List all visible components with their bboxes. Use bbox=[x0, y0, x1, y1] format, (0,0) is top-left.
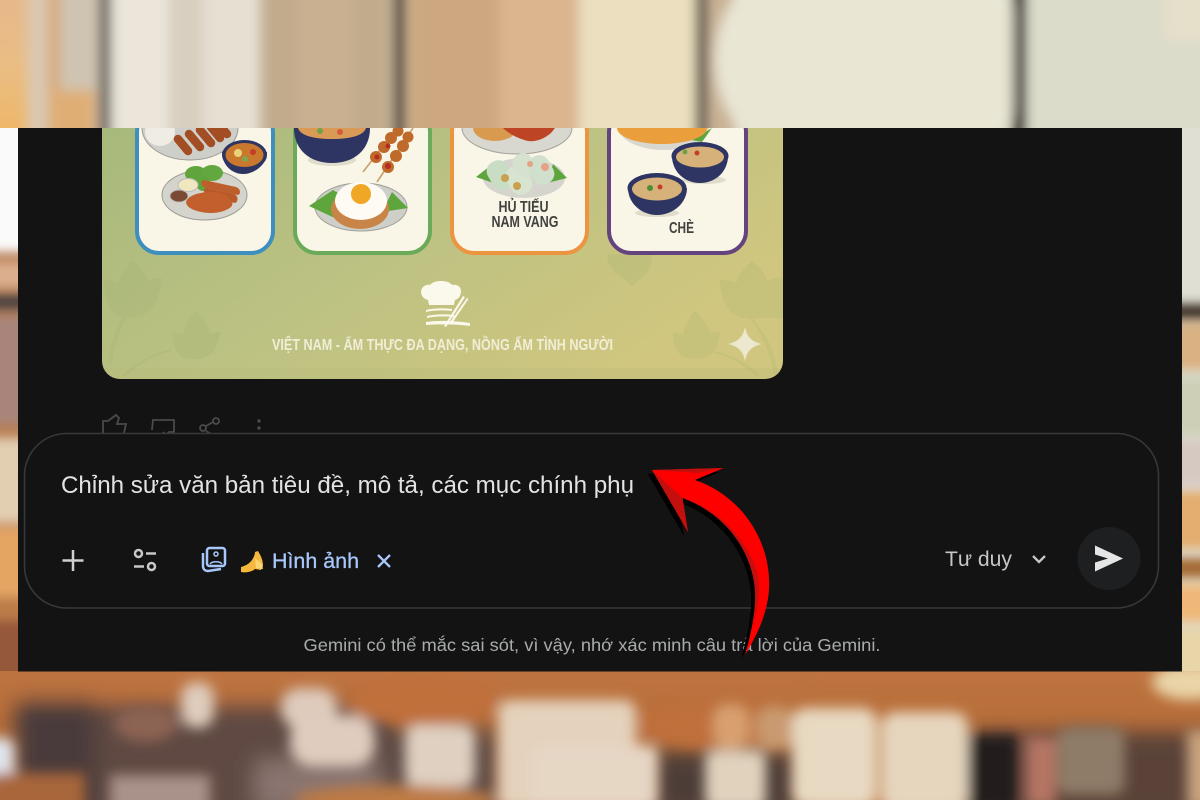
icon: banana bbox=[241, 551, 263, 572]
icon: plus bbox=[62, 550, 84, 571]
card: orange dishes bbox=[450, 128, 589, 255]
generated food poster image bbox=[102, 128, 783, 379]
dish: fried egg rice bbox=[309, 182, 408, 231]
dish: soup bowl left bbox=[628, 173, 687, 217]
dish: noodle bowl bbox=[294, 128, 370, 166]
dish: rice plate with sausages bbox=[142, 128, 238, 160]
decorative lotus watermarks bbox=[608, 254, 783, 376]
dish: savory pancake bbox=[617, 128, 712, 150]
label: Hủ tiếu Nam Vang: NAM VANG bbox=[492, 214, 558, 231]
icon: close bbox=[378, 555, 390, 567]
label: Chè: CHÈ bbox=[669, 218, 694, 237]
icon: chef hat with chopsticks bbox=[421, 281, 470, 327]
dish: fresh spring rolls bbox=[476, 150, 567, 198]
icon: share bbox=[200, 418, 219, 434]
icon: send arrow bbox=[1095, 546, 1123, 572]
model selector: Tư duy bbox=[945, 548, 1012, 571]
icon: gemini sparkle bbox=[728, 327, 762, 361]
footer slogan: VIỆT NAM - ẨM THỰC ĐA DẠNG, NỒNG ẤM TÌNH NGƯỜI bbox=[272, 335, 613, 354]
icon: thumbs up bbox=[103, 415, 126, 433]
dish: grilled pork plate bbox=[162, 165, 247, 220]
icon: tools sliders bbox=[134, 550, 156, 570]
dish: broken rice with pork bbox=[462, 128, 572, 154]
icon: chevron bbox=[1033, 556, 1045, 562]
send button bbox=[1078, 527, 1140, 590]
panel: Gemini dark chat window bbox=[18, 96, 1182, 672]
tool chip label: Hình ảnh bbox=[272, 549, 359, 573]
action icons row bbox=[103, 415, 261, 435]
card: purple dishes bbox=[607, 128, 748, 255]
arrow pointing to prompt bbox=[648, 468, 769, 659]
disclaimer: Gemini có thể mắc sai sót, vì vậy, nhớ xác minh câu trả lời của Gemini. bbox=[304, 634, 880, 655]
card: blue dishes bbox=[135, 128, 275, 255]
dish: grilled skewers bbox=[363, 126, 414, 182]
icon: more menu bbox=[257, 419, 261, 430]
label: Hủ tiếu Nam Vang bbox=[492, 198, 558, 227]
prompt text: Chỉnh sửa văn bản tiêu đề, mô tả, các mục chính phụ bbox=[61, 472, 634, 499]
card: green dishes bbox=[294, 110, 430, 253]
label: Hủ tiếu Nam Vang: HỦ TIẾU bbox=[498, 198, 548, 216]
icon: image stack bbox=[203, 548, 225, 571]
icon: thumbs down bbox=[152, 420, 174, 435]
dish: small soup bowl bbox=[222, 140, 267, 174]
prompt input box bbox=[24, 434, 1158, 608]
dish: soup bowl right bbox=[672, 142, 728, 184]
